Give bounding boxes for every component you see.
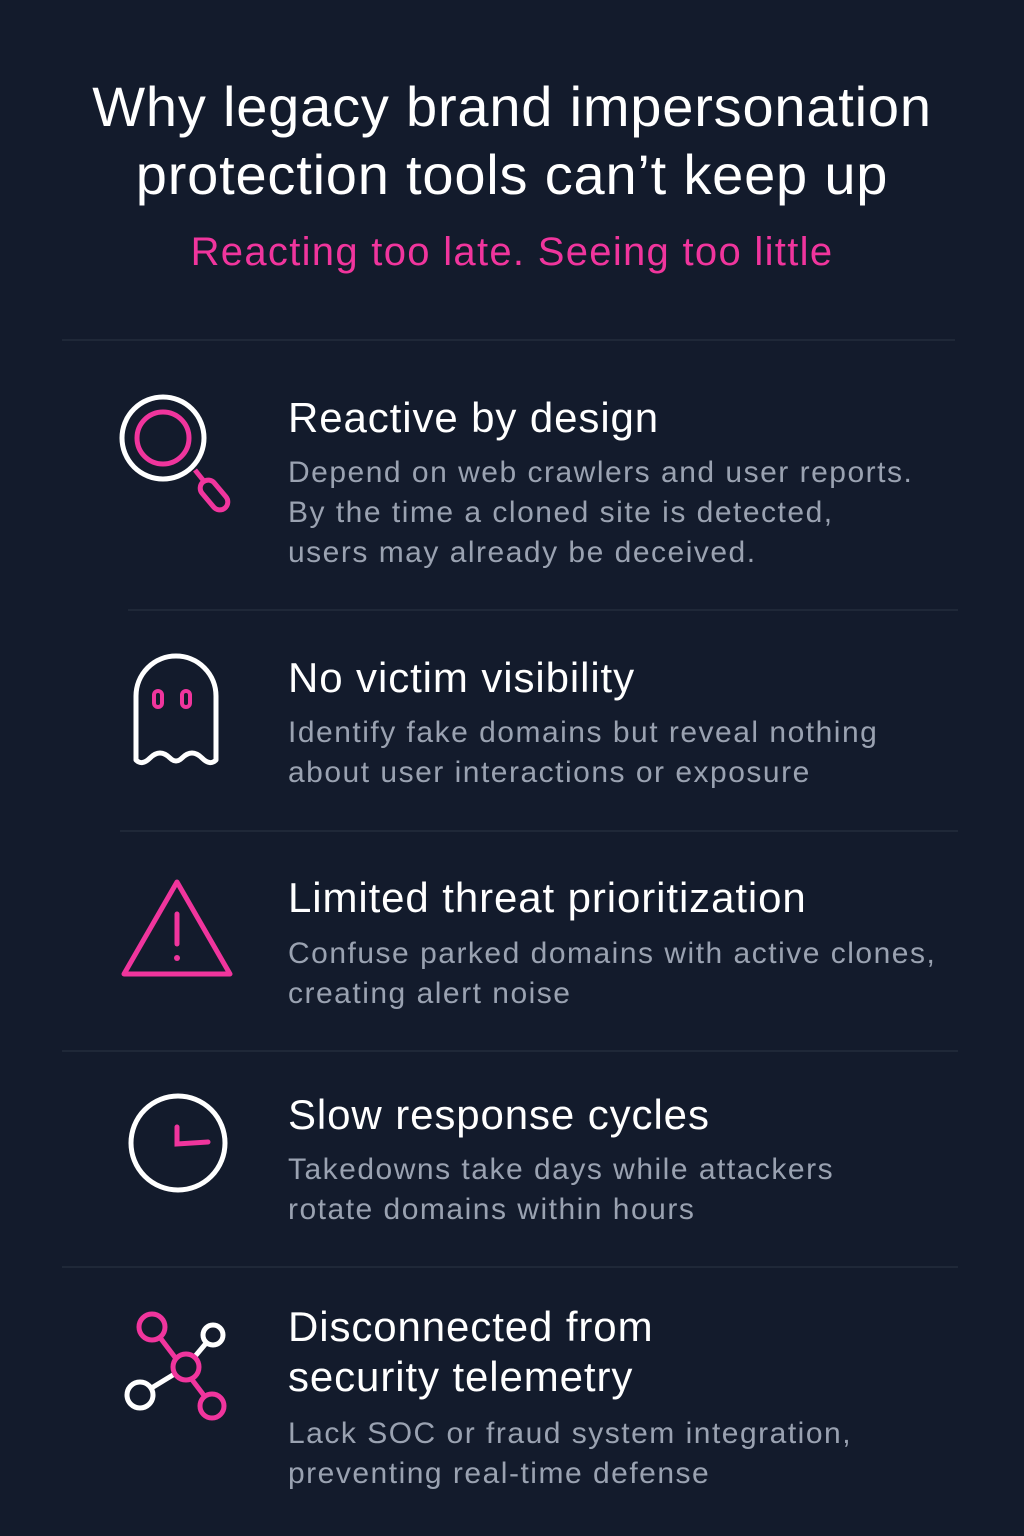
heading 4: Slow response cycles bbox=[288, 1091, 710, 1138]
body 4: rotate domains within hours bbox=[288, 1193, 695, 1226]
icon: network bbox=[124, 1312, 226, 1420]
title: protection tools can’t keep up bbox=[136, 143, 888, 206]
body 5 bbox=[288, 1417, 852, 1490]
body 5: Lack SOC or fraud system integration, bbox=[288, 1417, 852, 1450]
heading 1: Reactive by design bbox=[288, 394, 659, 441]
heading 5: Disconnected from bbox=[288, 1303, 653, 1350]
body 1: By the time a cloned site is detected, bbox=[288, 496, 834, 529]
body 3: Confuse parked domains with active clones, bbox=[288, 937, 936, 970]
body 2: Identify fake domains but reveal nothing bbox=[288, 716, 878, 749]
title: Why legacy brand impersonation bbox=[92, 75, 932, 138]
body 3 bbox=[288, 937, 936, 1010]
heading 5 bbox=[288, 1303, 653, 1400]
body 5: preventing real-time defense bbox=[288, 1457, 710, 1490]
heading 3: Limited threat prioritization bbox=[288, 874, 807, 921]
icon: clock bbox=[128, 1094, 228, 1192]
body 4: Takedowns take days while attackers bbox=[288, 1153, 834, 1186]
body 2: about user interactions or exposure bbox=[288, 756, 811, 789]
icon: warning bbox=[122, 880, 232, 976]
heading 2: No victim visibility bbox=[288, 654, 635, 701]
body 1 bbox=[288, 456, 913, 569]
body 2 bbox=[288, 716, 878, 789]
body 4 bbox=[288, 1153, 834, 1226]
body 3: creating alert noise bbox=[288, 977, 571, 1010]
heading 5: security telemetry bbox=[288, 1353, 633, 1400]
title bbox=[92, 75, 932, 206]
body 1: users may already be deceived. bbox=[288, 536, 757, 569]
icon: magnifier bbox=[120, 394, 230, 512]
body 1: Depend on web crawlers and user reports. bbox=[288, 456, 913, 489]
icon: ghost bbox=[134, 654, 218, 766]
subtitle: Reacting too late. Seeing too little bbox=[191, 230, 833, 274]
